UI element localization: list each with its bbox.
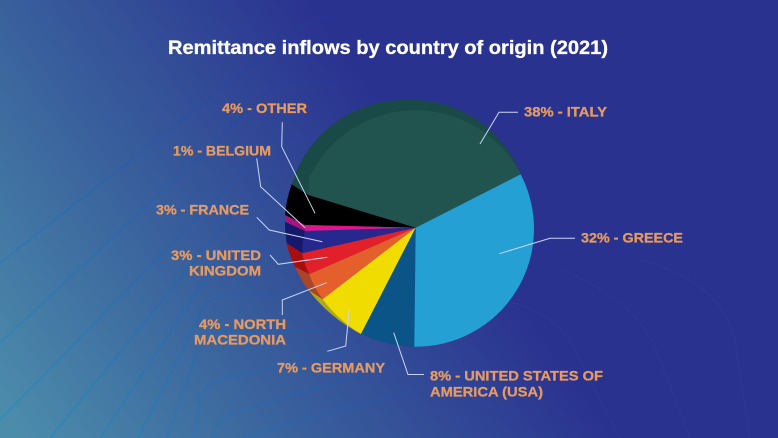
slice: Belgium 1% — [285, 215, 416, 231]
slice: Other 4% — [285, 184, 416, 228]
leader: Italy — [480, 112, 518, 144]
label: USA — [430, 368, 603, 400]
label: France: 3% - FRANCE — [156, 202, 249, 218]
leader: Germany — [327, 309, 349, 351]
label: Greece: 32% - GREECE — [581, 230, 683, 246]
label: North Macedonia: 4% - NORTH — [199, 316, 286, 332]
label: United Kingdom: KINGDOM — [189, 262, 261, 278]
label: Other: 4% - OTHER — [222, 100, 307, 116]
label: North Macedonia — [194, 316, 286, 348]
leader: Belgium — [257, 158, 305, 228]
leader: North Macedonia — [282, 283, 327, 315]
slice: Germany 7% — [308, 228, 416, 334]
slice: Italy 38% — [292, 100, 521, 228]
title: Remittance inflows by country of origin (2021) — [168, 38, 608, 59]
label: United Kingdom: 3% - UNITED — [171, 247, 261, 263]
slice: Greece 32% — [414, 174, 534, 347]
leader: United Kingdom — [270, 255, 327, 264]
pie chart — [285, 100, 534, 347]
leader: USA — [394, 333, 424, 374]
leader: France — [257, 217, 322, 242]
slice: North Macedonia 4% — [295, 228, 416, 299]
leader: Other — [282, 122, 315, 213]
label: USA: 8% - UNITED STATES OF — [430, 368, 603, 384]
label: United Kingdom — [171, 247, 261, 278]
slice: United States of America 8% — [361, 228, 416, 347]
label: North Macedonia: MACEDONIA — [194, 332, 286, 348]
leader: Greece — [499, 238, 575, 254]
label: Italy: 38% - ITALY — [524, 104, 608, 120]
slice: United Kingdom 3% — [287, 228, 416, 274]
label: USA: AMERICA (USA) — [430, 384, 543, 400]
slice: France 3% — [285, 222, 416, 253]
label: Belgium: 1% - BELGIUM — [173, 142, 271, 158]
label: Germany: 7% - GERMANY — [277, 360, 386, 376]
